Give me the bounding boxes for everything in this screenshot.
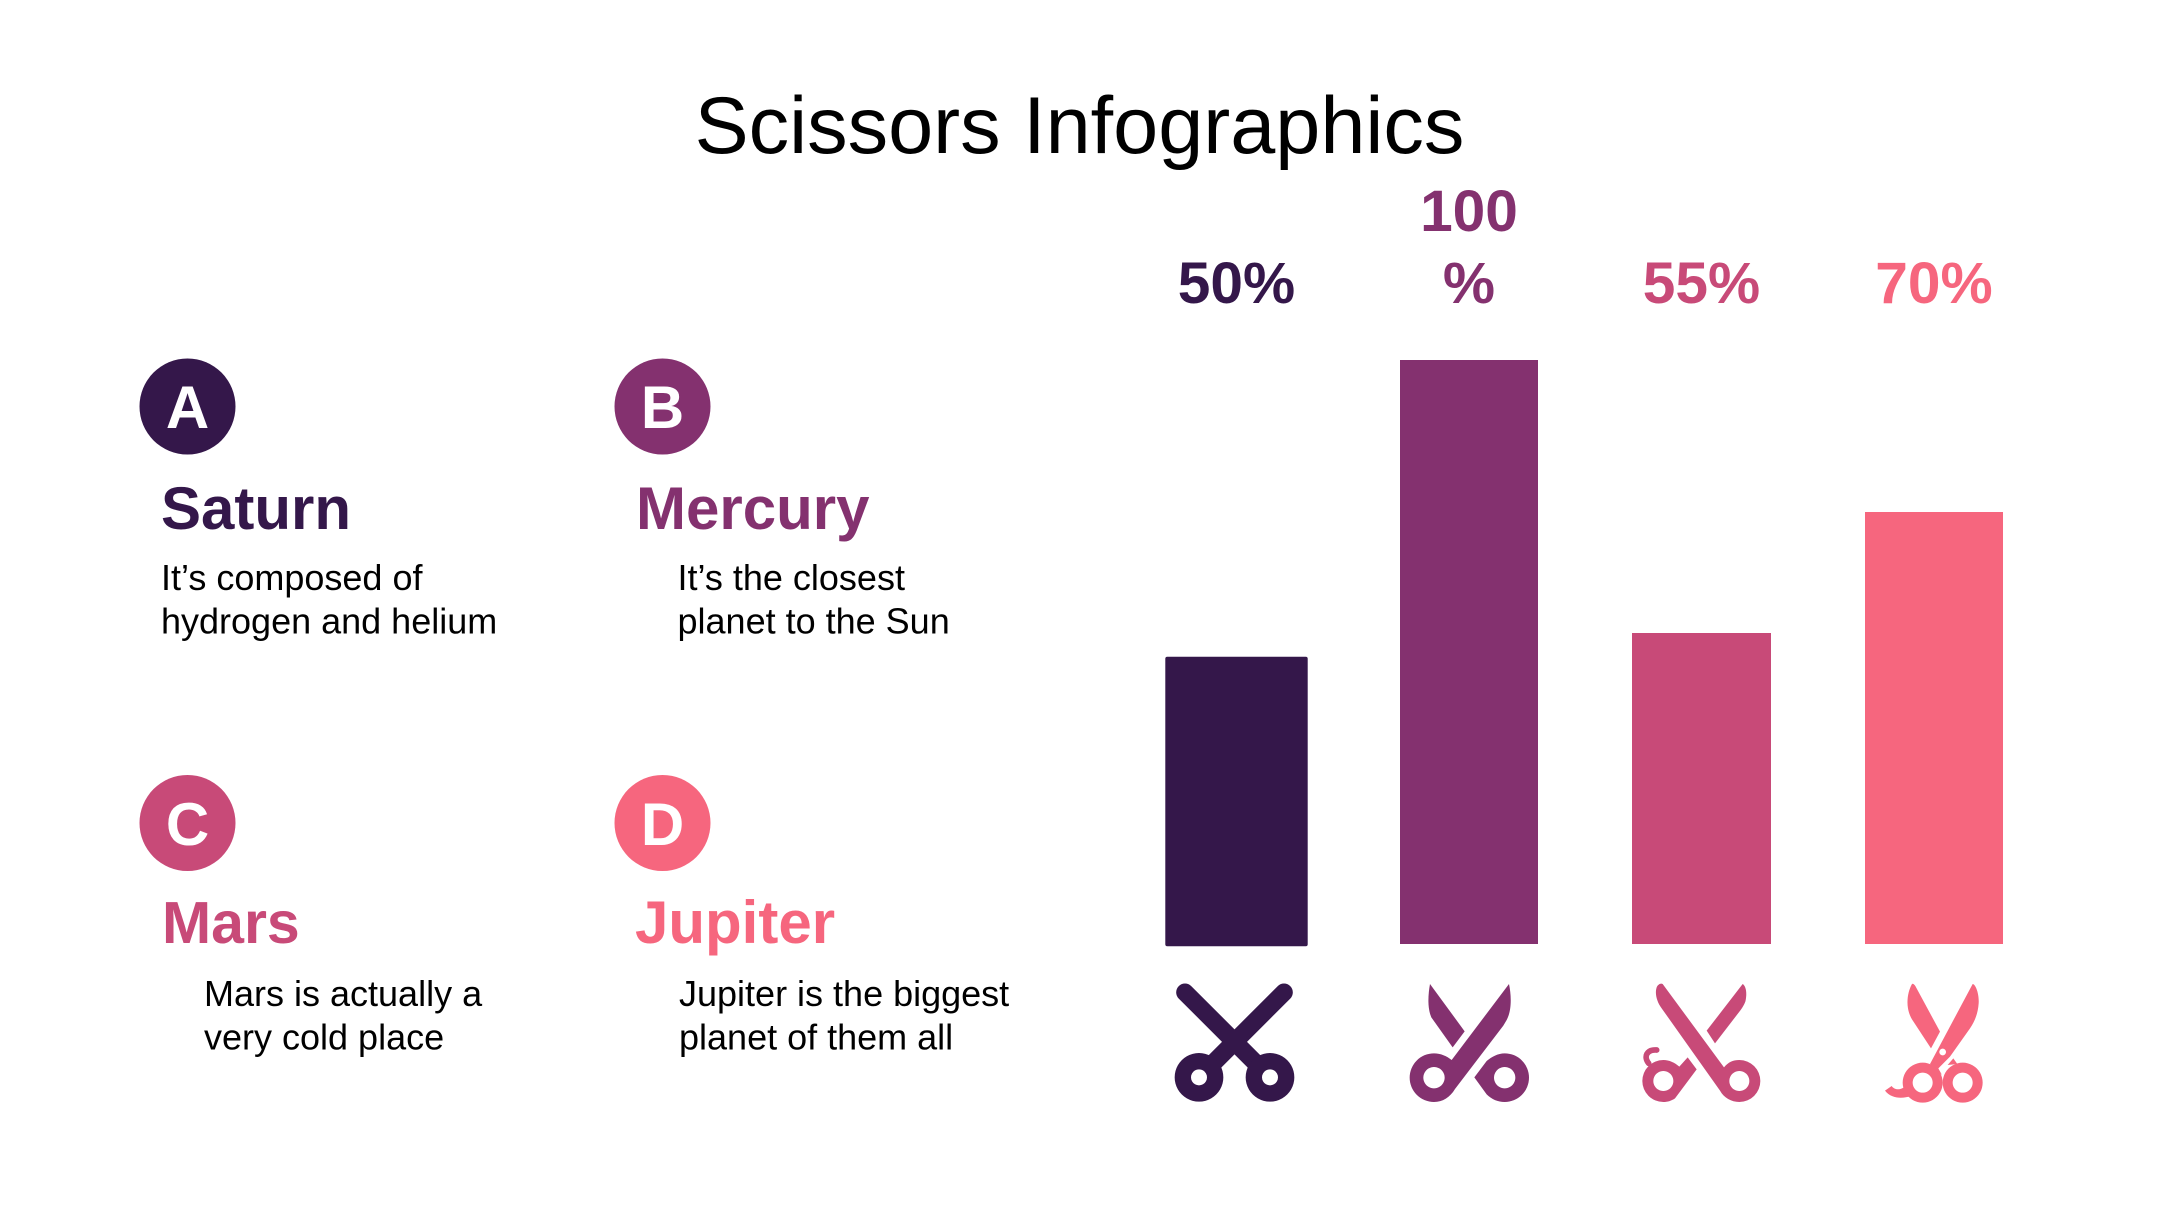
badge A: A [166,374,209,441]
text Saturn: hydrogen and helium [161,600,497,642]
bar 100% [1400,360,1538,944]
badge C: C [166,791,209,858]
bar 70% [1865,512,2003,944]
icon: scissors 3 [1642,984,1760,1102]
panel: B Mercury [614,358,950,642]
text Jupiter: planet of them all [679,1016,953,1058]
text Mars: Mars is actually a [204,973,483,1014]
panel: A Saturn [140,358,497,642]
badge C [140,775,236,871]
panel: D Jupiter [614,775,1009,1058]
heading Mars: Mars [162,890,300,956]
bar 55% [1632,633,1771,944]
value 50%: 50% [1178,251,1295,316]
value 55%: 55% [1643,251,1760,316]
badge A [140,358,236,454]
heading Jupiter: Jupiter [635,889,835,956]
bar 50% [1165,657,1308,946]
icon: scissors 4 [1885,984,1983,1103]
badge B [614,358,710,454]
value 70%: 70% [1875,251,1993,316]
bar chart [1165,179,2003,946]
badge D: D [641,791,684,858]
text Mercury: planet to the Sun [678,600,950,642]
badge B: B [641,374,684,441]
text Jupiter: Jupiter is the biggest [679,973,1009,1014]
title: Scissors Infographics [695,81,1464,171]
text Mercury: It’s the closest [678,557,905,598]
icon: scissors 1 [1175,992,1294,1102]
panel: C Mars [140,775,483,1058]
icon: scissors 2 [1410,984,1529,1102]
value 100%: % [1443,251,1495,316]
text Mars: very cold place [204,1016,444,1058]
heading Mercury: Mercury [636,475,870,542]
heading Saturn: Saturn [161,475,351,542]
value 100%: 100 [1420,179,1518,244]
text Saturn: It’s composed of [161,557,423,598]
badge D [614,775,710,871]
